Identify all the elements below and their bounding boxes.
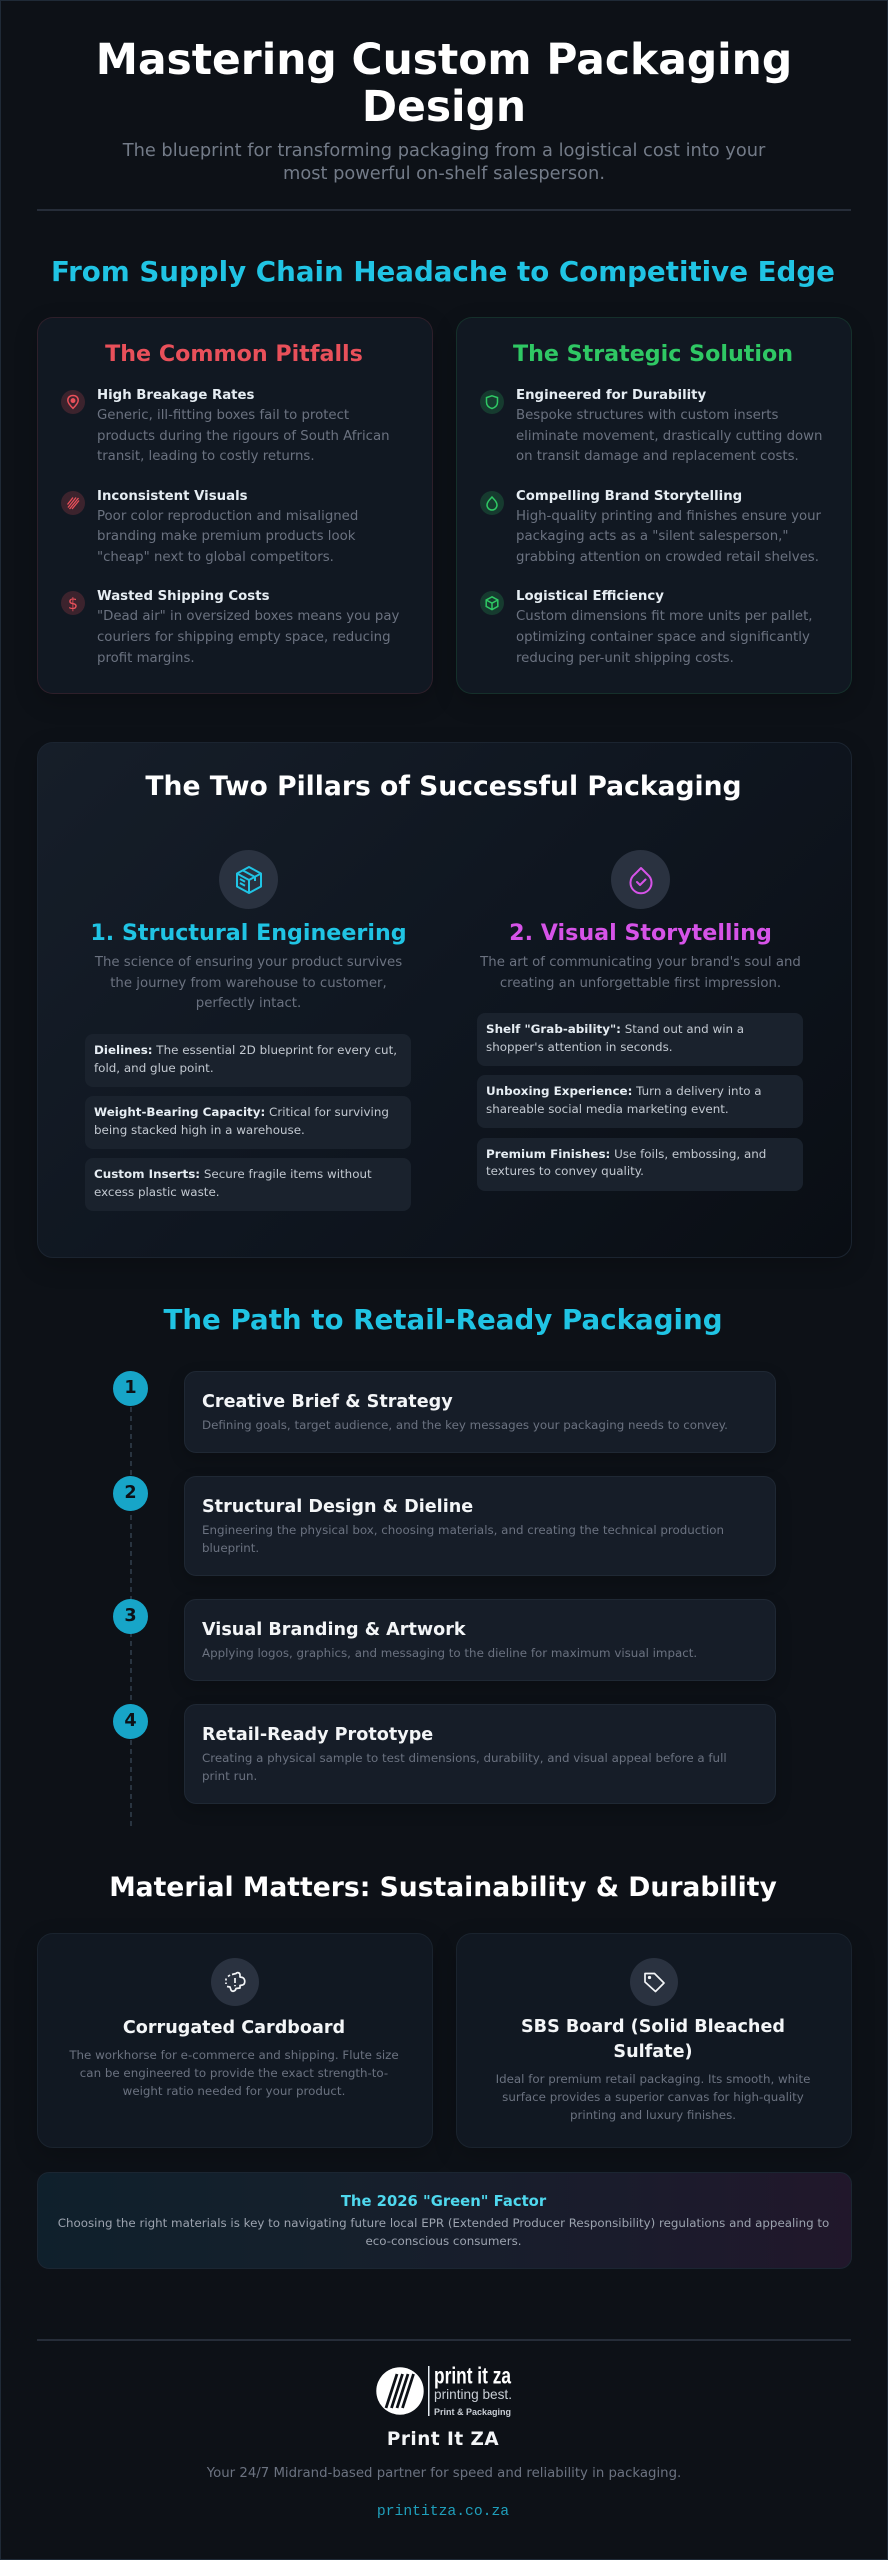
card description: can be engineered to provide the exact strength-to- <box>80 2066 388 2080</box>
step description <box>202 1751 727 1783</box>
callout title: The 2026 "Green" Factor <box>341 2193 546 2210</box>
step description: print run. <box>202 1769 257 1783</box>
chip: premium finishes <box>477 1138 803 1190</box>
card description: printing and luxury finishes. <box>570 2108 736 2122</box>
chip: unboxing experience: shareable social media marketing event. <box>486 1102 729 1116</box>
step title: Visual Branding & Artwork <box>202 1620 466 1640</box>
callout text: eco-conscious consumers. <box>365 2234 522 2248</box>
logo <box>376 2366 512 2417</box>
item: engineered for durability: Bespoke structures with custom inserts <box>516 408 778 423</box>
callout text <box>58 2216 829 2248</box>
pillar description <box>94 955 402 1011</box>
icon: hatch lines <box>61 491 85 515</box>
item: high breakage rates: transit, leading to costly returns. <box>97 449 315 464</box>
item: compelling brand storytelling: grabbing attention on crowded retail shelves. <box>516 550 819 565</box>
pillar description: The art of communicating your brand's soul and <box>480 955 801 970</box>
brand name: Print It ZA <box>387 2429 499 2450</box>
section heading: supply chain: From Supply Chain Headache to Competitive Edge <box>51 255 835 288</box>
step 3 number <box>113 1599 148 1634</box>
card description: weight ratio needed for your product. <box>123 2084 345 2098</box>
pillar description: the journey from warehouse to customer, <box>110 976 387 991</box>
pillar title: 1. Structural Engineering <box>90 920 407 946</box>
chip: premium finishes: Premium Finishes: Use foils, embossing, and <box>486 1146 766 1160</box>
footer <box>206 2366 681 2520</box>
step 4 card <box>184 1704 776 1804</box>
panel: common pitfalls <box>37 317 433 694</box>
chip: dielines: fold, and glue point. <box>94 1061 214 1075</box>
section heading: materials: Material Matters: Sustainability & Durability <box>109 1872 777 1903</box>
icon: dollar <box>61 591 85 615</box>
item: high breakage rates: products during the rigours of South African <box>97 429 390 444</box>
step 2 number <box>113 1476 148 1511</box>
callout text: Choosing the right materials is key to navigating future local EPR (Extended Producer Responsibility) regulations and appealing to <box>58 2216 829 2230</box>
subtitle: most powerful on-shelf salesperson. <box>283 163 605 184</box>
item: compelling brand storytelling <box>516 489 821 565</box>
item: engineered for durability: eliminate movement, drastically cutting down <box>516 429 822 444</box>
card title: SBS Board (Solid Bleached <box>521 2017 785 2037</box>
card description: Ideal for premium retail packaging. Its smooth, white <box>496 2072 810 2086</box>
item: compelling brand storytelling: Compelling Brand Storytelling <box>516 489 742 504</box>
item: logistical efficiency: Logistical Efficiency <box>516 589 664 604</box>
panel: sbs board <box>456 1933 852 2148</box>
item: logistical efficiency: Custom dimensions fit more units per pallet, <box>516 609 813 624</box>
icon: tag <box>630 1958 678 2006</box>
panel: two pillars <box>37 742 852 1258</box>
tagline: Your 24/7 Midrand-based partner for speed and reliability in packaging. <box>207 2466 681 2481</box>
panel heading: The Two Pillars of Successful Packaging <box>145 771 742 802</box>
item: inconsistent visuals <box>97 489 358 565</box>
step 1 number <box>113 1371 148 1406</box>
chip: custom inserts: excess plastic waste. <box>94 1185 220 1199</box>
step 3 number: 3 <box>124 1606 137 1626</box>
pillar title: 2. Visual Storytelling <box>509 920 772 946</box>
title <box>96 34 792 130</box>
item: inconsistent visuals: branding make premium products look <box>97 529 355 544</box>
card description <box>69 2048 399 2098</box>
card description: The workhorse for e-commerce and shipping. Flute size <box>69 2048 399 2062</box>
chip: shelf grab-ability: shopper's attention in seconds. <box>486 1040 673 1054</box>
timeline <box>113 1371 776 1826</box>
header <box>96 34 792 184</box>
chip: custom inserts: Custom Inserts: Secure fragile items without <box>94 1167 372 1181</box>
item: logistical efficiency: reducing per-unit shipping costs. <box>516 651 734 666</box>
pillar description: The science of ensuring your product survives <box>95 955 402 970</box>
section heading: path: The Path to Retail-Ready Packaging <box>163 1303 723 1336</box>
website: printitza.co.za <box>377 2504 509 2520</box>
item: high breakage rates: Generic, ill-fitting boxes fail to protect <box>97 408 349 423</box>
chip: weight-bearing capacity: Weight-Bearing Capacity: Critical for surviving <box>94 1105 389 1119</box>
chip: dielines: Dielines: The essential 2D blueprint for every cut, <box>94 1043 397 1057</box>
panel: corrugated cardboard <box>37 1933 433 2148</box>
item: inconsistent visuals: Inconsistent Visuals <box>97 489 248 504</box>
item: engineered for durability: on transit damage and replacement costs. <box>516 449 799 464</box>
card description <box>496 2072 810 2122</box>
icon: shield alert <box>61 390 85 414</box>
column: structural engineering <box>85 850 411 1211</box>
step 2 number: 2 <box>124 1483 137 1503</box>
item: compelling brand storytelling: packaging acts as a "silent salesperson," <box>516 529 789 544</box>
icon: dollar: $ <box>68 594 78 613</box>
item: logistical efficiency <box>516 589 813 666</box>
step title: Creative Brief & Strategy <box>202 1392 453 1412</box>
panel heading: The Common Pitfalls <box>105 341 363 367</box>
card title: Sulfate) <box>613 2042 693 2062</box>
card description: surface provides a superior canvas for high-quality <box>502 2090 804 2104</box>
item: inconsistent visuals: "cheap" next to global competitors. <box>97 550 334 565</box>
step description: Defining goals, target audience, and the key messages your packaging needs to convey. <box>202 1418 728 1432</box>
card title: Corrugated Cardboard <box>123 2018 345 2038</box>
item: wasted shipping costs <box>97 589 399 666</box>
logo: printing best. <box>434 2386 512 2402</box>
item: high breakage rates: High Breakage Rates <box>97 388 254 403</box>
item: wasted shipping costs: "Dead air" in oversized boxes means you pay <box>97 609 399 624</box>
item: engineered for durability: Engineered for Durability <box>516 388 706 403</box>
step 1 card <box>184 1371 776 1453</box>
pillar description: creating an unforgettable first impression. <box>500 976 781 991</box>
icon: box <box>219 850 278 909</box>
pillar description <box>480 955 801 991</box>
chip: unboxing experience: Unboxing Experience: Turn a delivery into a <box>486 1084 762 1098</box>
step description: blueprint. <box>202 1541 259 1555</box>
step 4 number: 4 <box>124 1711 137 1731</box>
item: wasted shipping costs: couriers for shipping empty space, reducing <box>97 630 391 645</box>
chip: dielines <box>85 1034 411 1087</box>
chip: shelf grab-ability <box>477 1013 803 1066</box>
step description: Applying logos, graphics, and messaging to the dieline for maximum visual impact. <box>202 1646 697 1660</box>
item: logistical efficiency: optimizing container space and significantly <box>516 630 810 645</box>
pillar description: perfectly intact. <box>196 996 301 1011</box>
subtitle <box>122 140 766 184</box>
item: wasted shipping costs: profit margins. <box>97 651 195 666</box>
icon: drop check <box>611 850 670 909</box>
panel heading: The Strategic Solution <box>513 341 793 367</box>
title: Design <box>362 82 526 130</box>
icon: shield <box>480 390 504 414</box>
step 3 card <box>184 1599 776 1681</box>
chip: shelf grab-ability: Shelf "Grab-ability": Stand out and win a <box>486 1022 744 1036</box>
panel: strategic solution <box>456 317 852 694</box>
icon: drop <box>480 491 504 515</box>
title: Mastering Custom Packaging <box>96 34 792 84</box>
step title: Retail-Ready Prototype <box>202 1725 433 1745</box>
step description <box>202 1523 724 1555</box>
item: compelling brand storytelling: High-quality printing and finishes ensure your <box>516 509 821 524</box>
step 2 card <box>184 1476 776 1576</box>
item: inconsistent visuals: Poor color reproduction and misaligned <box>97 509 358 524</box>
item: high breakage rates <box>97 388 390 464</box>
chip: weight-bearing capacity <box>85 1096 411 1149</box>
callout: green factor <box>37 2172 852 2269</box>
icon: cube <box>480 591 504 615</box>
step title: Structural Design & Dieline <box>202 1497 473 1517</box>
item: engineered for durability <box>516 388 822 464</box>
chip: premium finishes: textures to convey quality. <box>486 1164 644 1178</box>
item: wasted shipping costs: Wasted Shipping Costs <box>97 589 270 604</box>
chip: custom inserts <box>85 1158 411 1211</box>
subtitle: The blueprint for transforming packaging from a logistical cost into your <box>123 140 765 160</box>
step 4 number <box>113 1704 148 1739</box>
chip: weight-bearing capacity: being stacked high in a warehouse. <box>94 1123 305 1137</box>
step description: Creating a physical sample to test dimensions, durability, and visual appeal before a full <box>202 1751 727 1765</box>
icon: puzzle <box>210 1958 258 2006</box>
step description: Engineering the physical box, choosing materials, and creating the technical production <box>202 1523 724 1537</box>
step 1 number: 1 <box>124 1378 137 1398</box>
logo: Print & Packaging <box>434 2407 511 2417</box>
chip: unboxing experience <box>477 1075 803 1128</box>
card title <box>521 2017 785 2062</box>
column: visual storytelling <box>477 850 803 1191</box>
